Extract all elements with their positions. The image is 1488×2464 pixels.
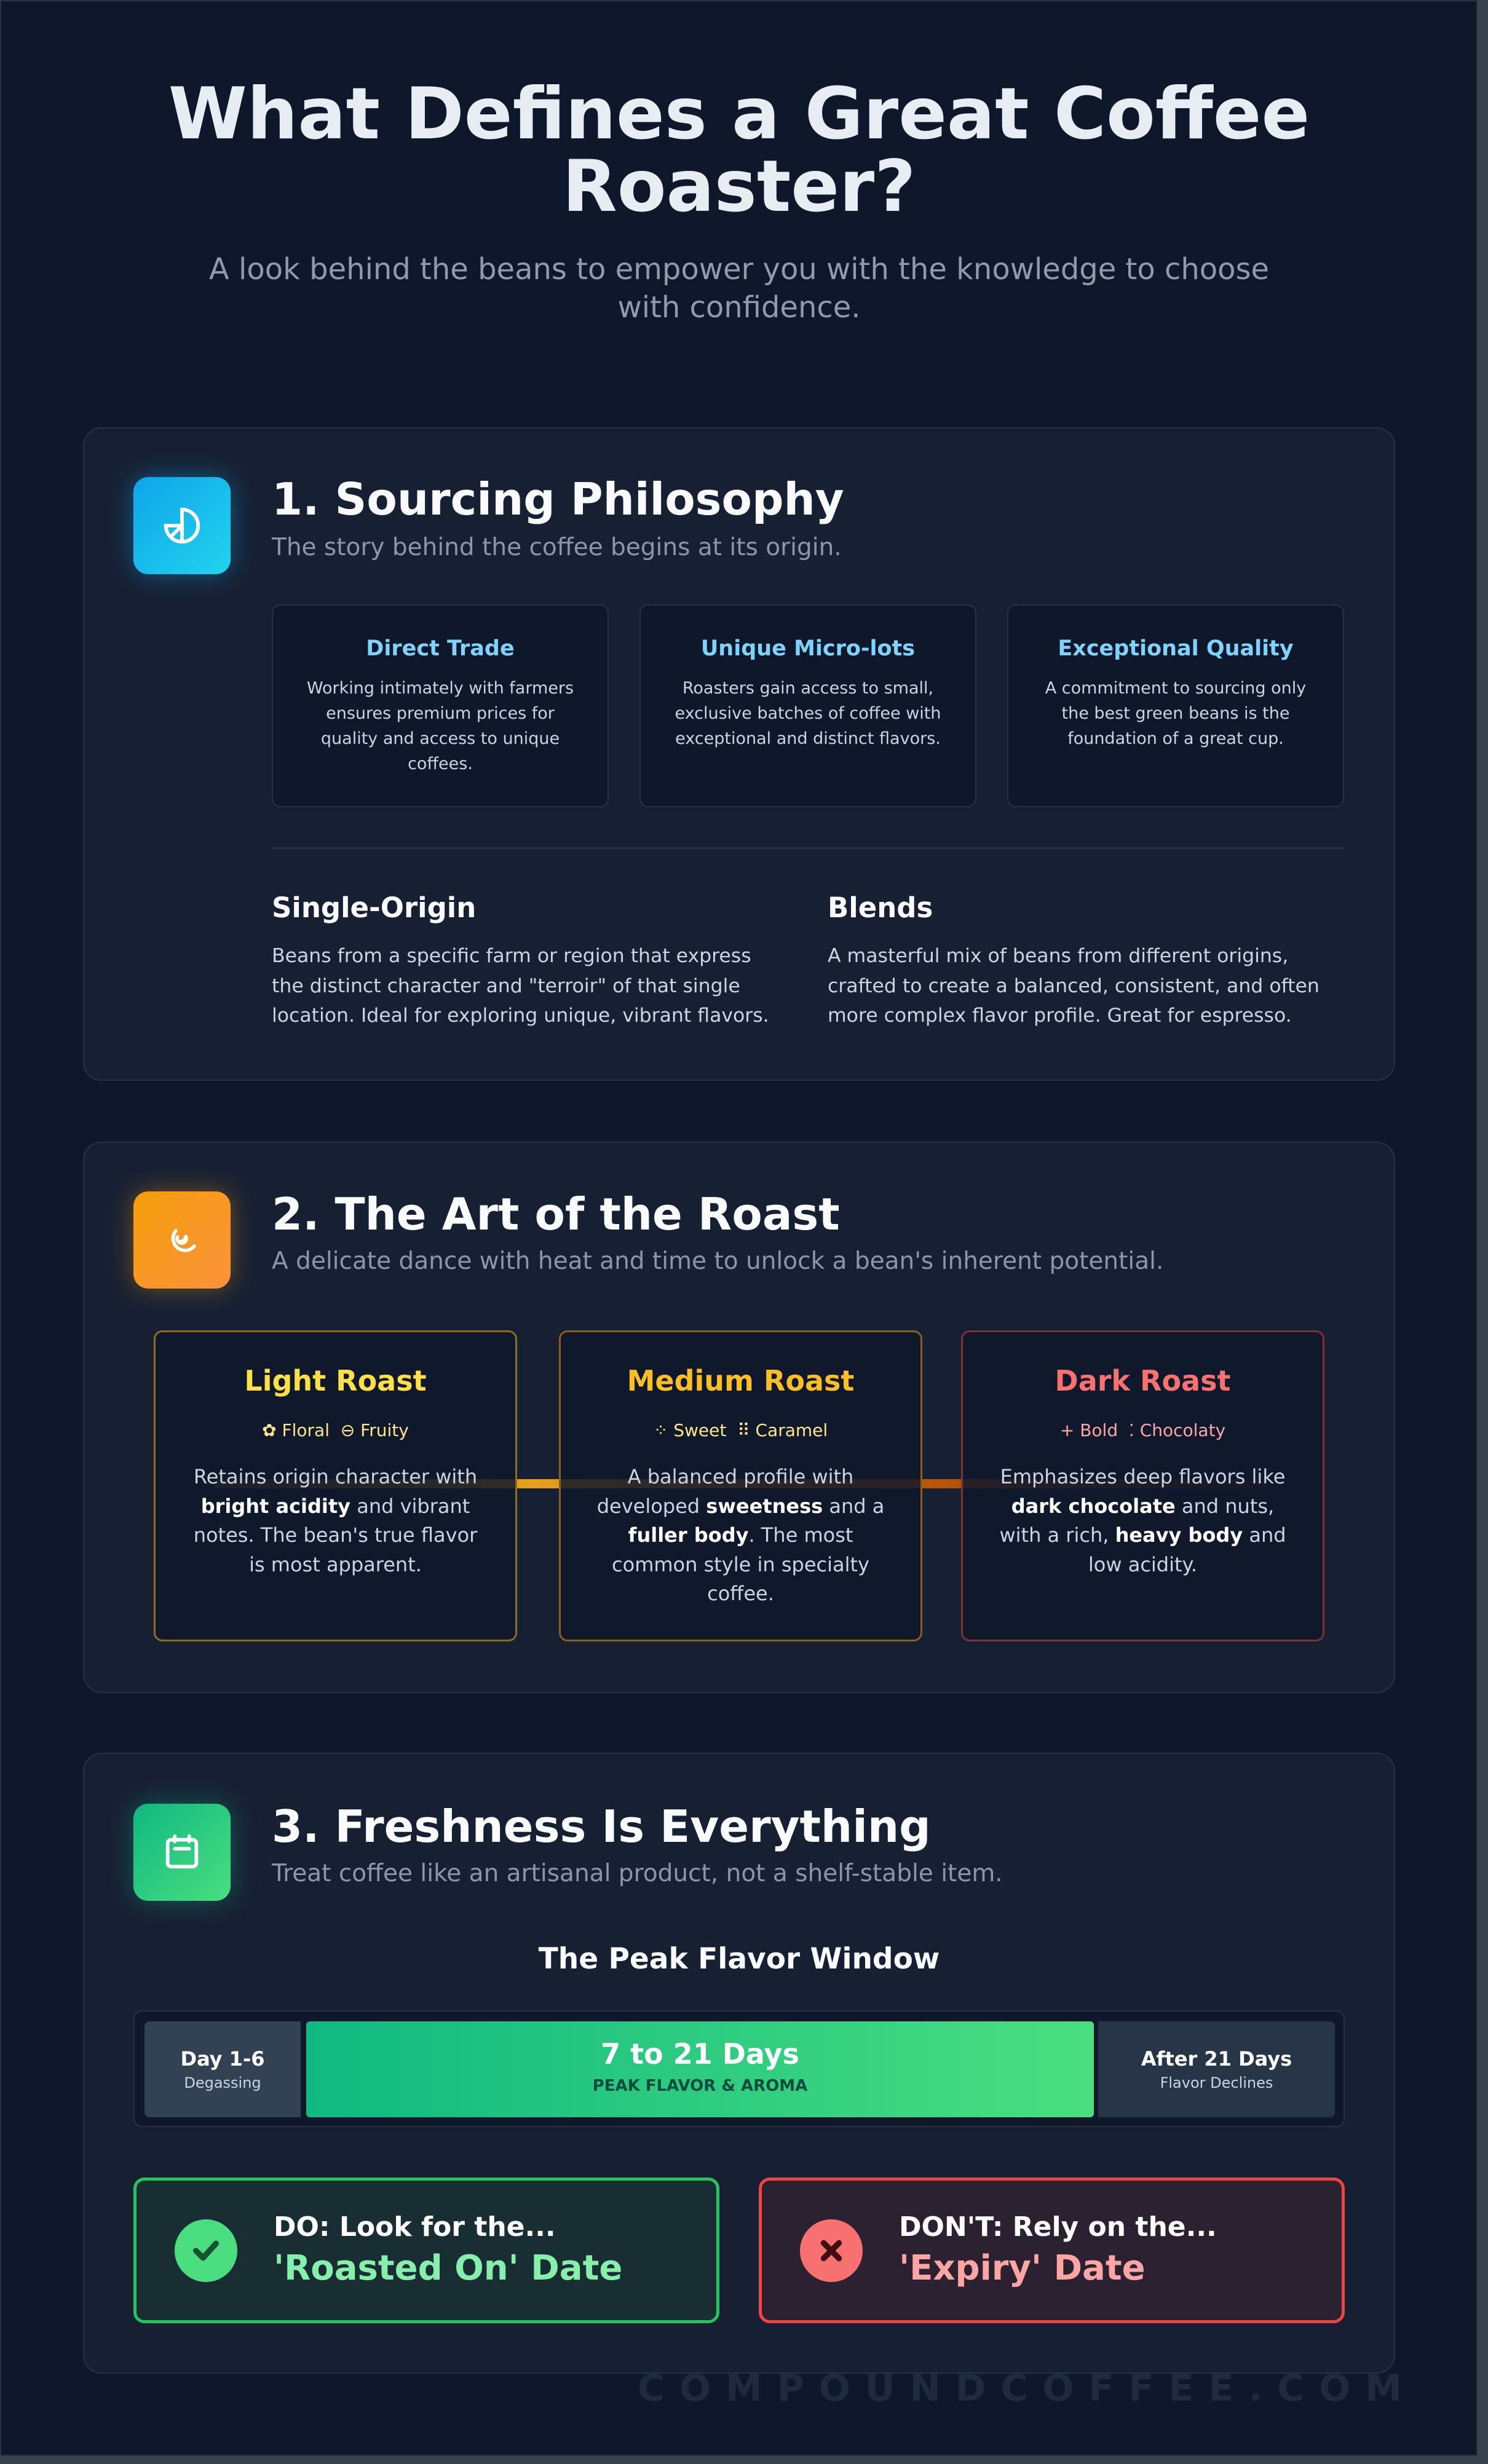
text: blends: A masterful mix of beans from different origins, crafted to create a balanced, consistent, and often more complex flavor profile. Great for espresso. [828,945,1320,1027]
text: single-origin [272,891,769,1027]
card: quality [1007,604,1344,807]
card: dark roast: + Bold ⁚ Chocolaty [1060,1420,1225,1440]
icon: sourcing [133,477,231,574]
panel: freshness [83,1753,1395,2374]
heading: roast: 2. The Art of the Roast [272,1188,840,1240]
callout: dont: 'Expiry' Date [899,2248,1146,2288]
chart title: The Peak Flavor Window [539,1942,940,1976]
card: light roast: Retains origin character with bright acidity and vibrant notes. The bean's true flavor is most apparent. [194,1465,477,1576]
card: light roast: ✿ Floral ⊖ Fruity [262,1420,409,1440]
callout: do: 'Roasted On' Date [274,2248,622,2288]
panel: sourcing philosophy [83,427,1395,1081]
subheading: sourcing: The story behind the coffee begins at its origin. [272,534,842,561]
card: micro-lots: Roasters gain access to small, exclusive batches of coffee with exceptional and distinct flavors. [675,679,941,748]
card: dark roast: Emphasizes deep flavors like dark chocolate and nuts, with a rich, heavy body and low acidity. [999,1465,1286,1576]
title [168,73,1310,228]
segment: peak: 7 to 21 Days [601,2037,799,2071]
icon: check [175,2219,237,2282]
card: medium roast: Medium Roast [627,1364,854,1397]
segment: decline: Flavor Declines [1160,2074,1273,2091]
title: Roaster? [563,145,916,228]
card: direct trade: Working intimately with farmers ensures premium prices for quality and access to unique coffees. [307,679,574,773]
card: light roast: Light Roast [244,1364,427,1397]
segment: peak [306,2021,1094,2117]
segment: degassing: Day 1-6 [181,2047,264,2071]
callout: do [133,2178,719,2323]
panel: art of the roast [83,1142,1395,1693]
segment: peak: PEAK FLAVOR & AROMA [593,2077,807,2095]
card: dark roast: Dark Roast [1055,1364,1230,1397]
card: direct trade: Direct Trade [366,636,515,661]
subheading: freshness: Treat coffee like an artisanal product, not a shelf-stable item. [272,1860,1003,1887]
timeline chart [133,2010,1345,2127]
title: What Defines a Great Coffee [168,73,1310,156]
card: medium roast: A balanced profile with developed sweetness and a fuller body. The most common style in specialty coffee. [597,1465,884,1605]
card: light roast [154,1330,517,1641]
callout: do: DO: Look for the... [274,2211,556,2243]
card: medium roast [559,1330,922,1641]
heading: sourcing: 1. Sourcing Philosophy [272,473,844,525]
card: micro-lots [639,604,976,807]
icon: cross [800,2219,863,2282]
callout: dont [759,2178,1345,2323]
callout: dont: DON'T: Rely on the... [899,2211,1217,2243]
icon: roast [133,1191,231,1289]
subheading: roast: A delicate dance with heat and time to unlock a bean's inherent potential. [272,1247,1163,1275]
card: direct trade [272,604,609,807]
card: quality: Exceptional Quality [1058,636,1294,661]
segment: degassing: Degassing [184,2074,261,2091]
text: single-origin: Single-Origin [272,891,476,924]
segment: decline: After 21 Days [1141,2047,1292,2071]
card: medium roast: ⁘ Sweet ⠿ Caramel [654,1420,828,1440]
segment: degassing [144,2021,301,2117]
watermark: COMPOUNDCOFFEE.COM [638,2367,1417,2410]
segment: decline [1098,2021,1335,2117]
icon: calendar [133,1804,231,1901]
heading: freshness: 3. Freshness Is Everything [272,1801,931,1852]
card: quality: A commitment to sourcing only the best green beans is the foundation of a great cup. [1045,679,1306,748]
card: micro-lots: Unique Micro-lots [701,636,915,661]
text: single-origin: Beans from a specific farm or region that express the distinct character and "terroir" of that single location. Ideal for exploring unique, vibrant flavors. [272,945,769,1027]
subtitle: A look behind the beans to empower you with the knowledge to choose with confidence. [209,252,1269,325]
roast connector bar [213,1479,1274,1488]
text: blends [828,891,1320,1027]
card: dark roast [961,1330,1324,1641]
text: blends: Blends [828,891,933,924]
